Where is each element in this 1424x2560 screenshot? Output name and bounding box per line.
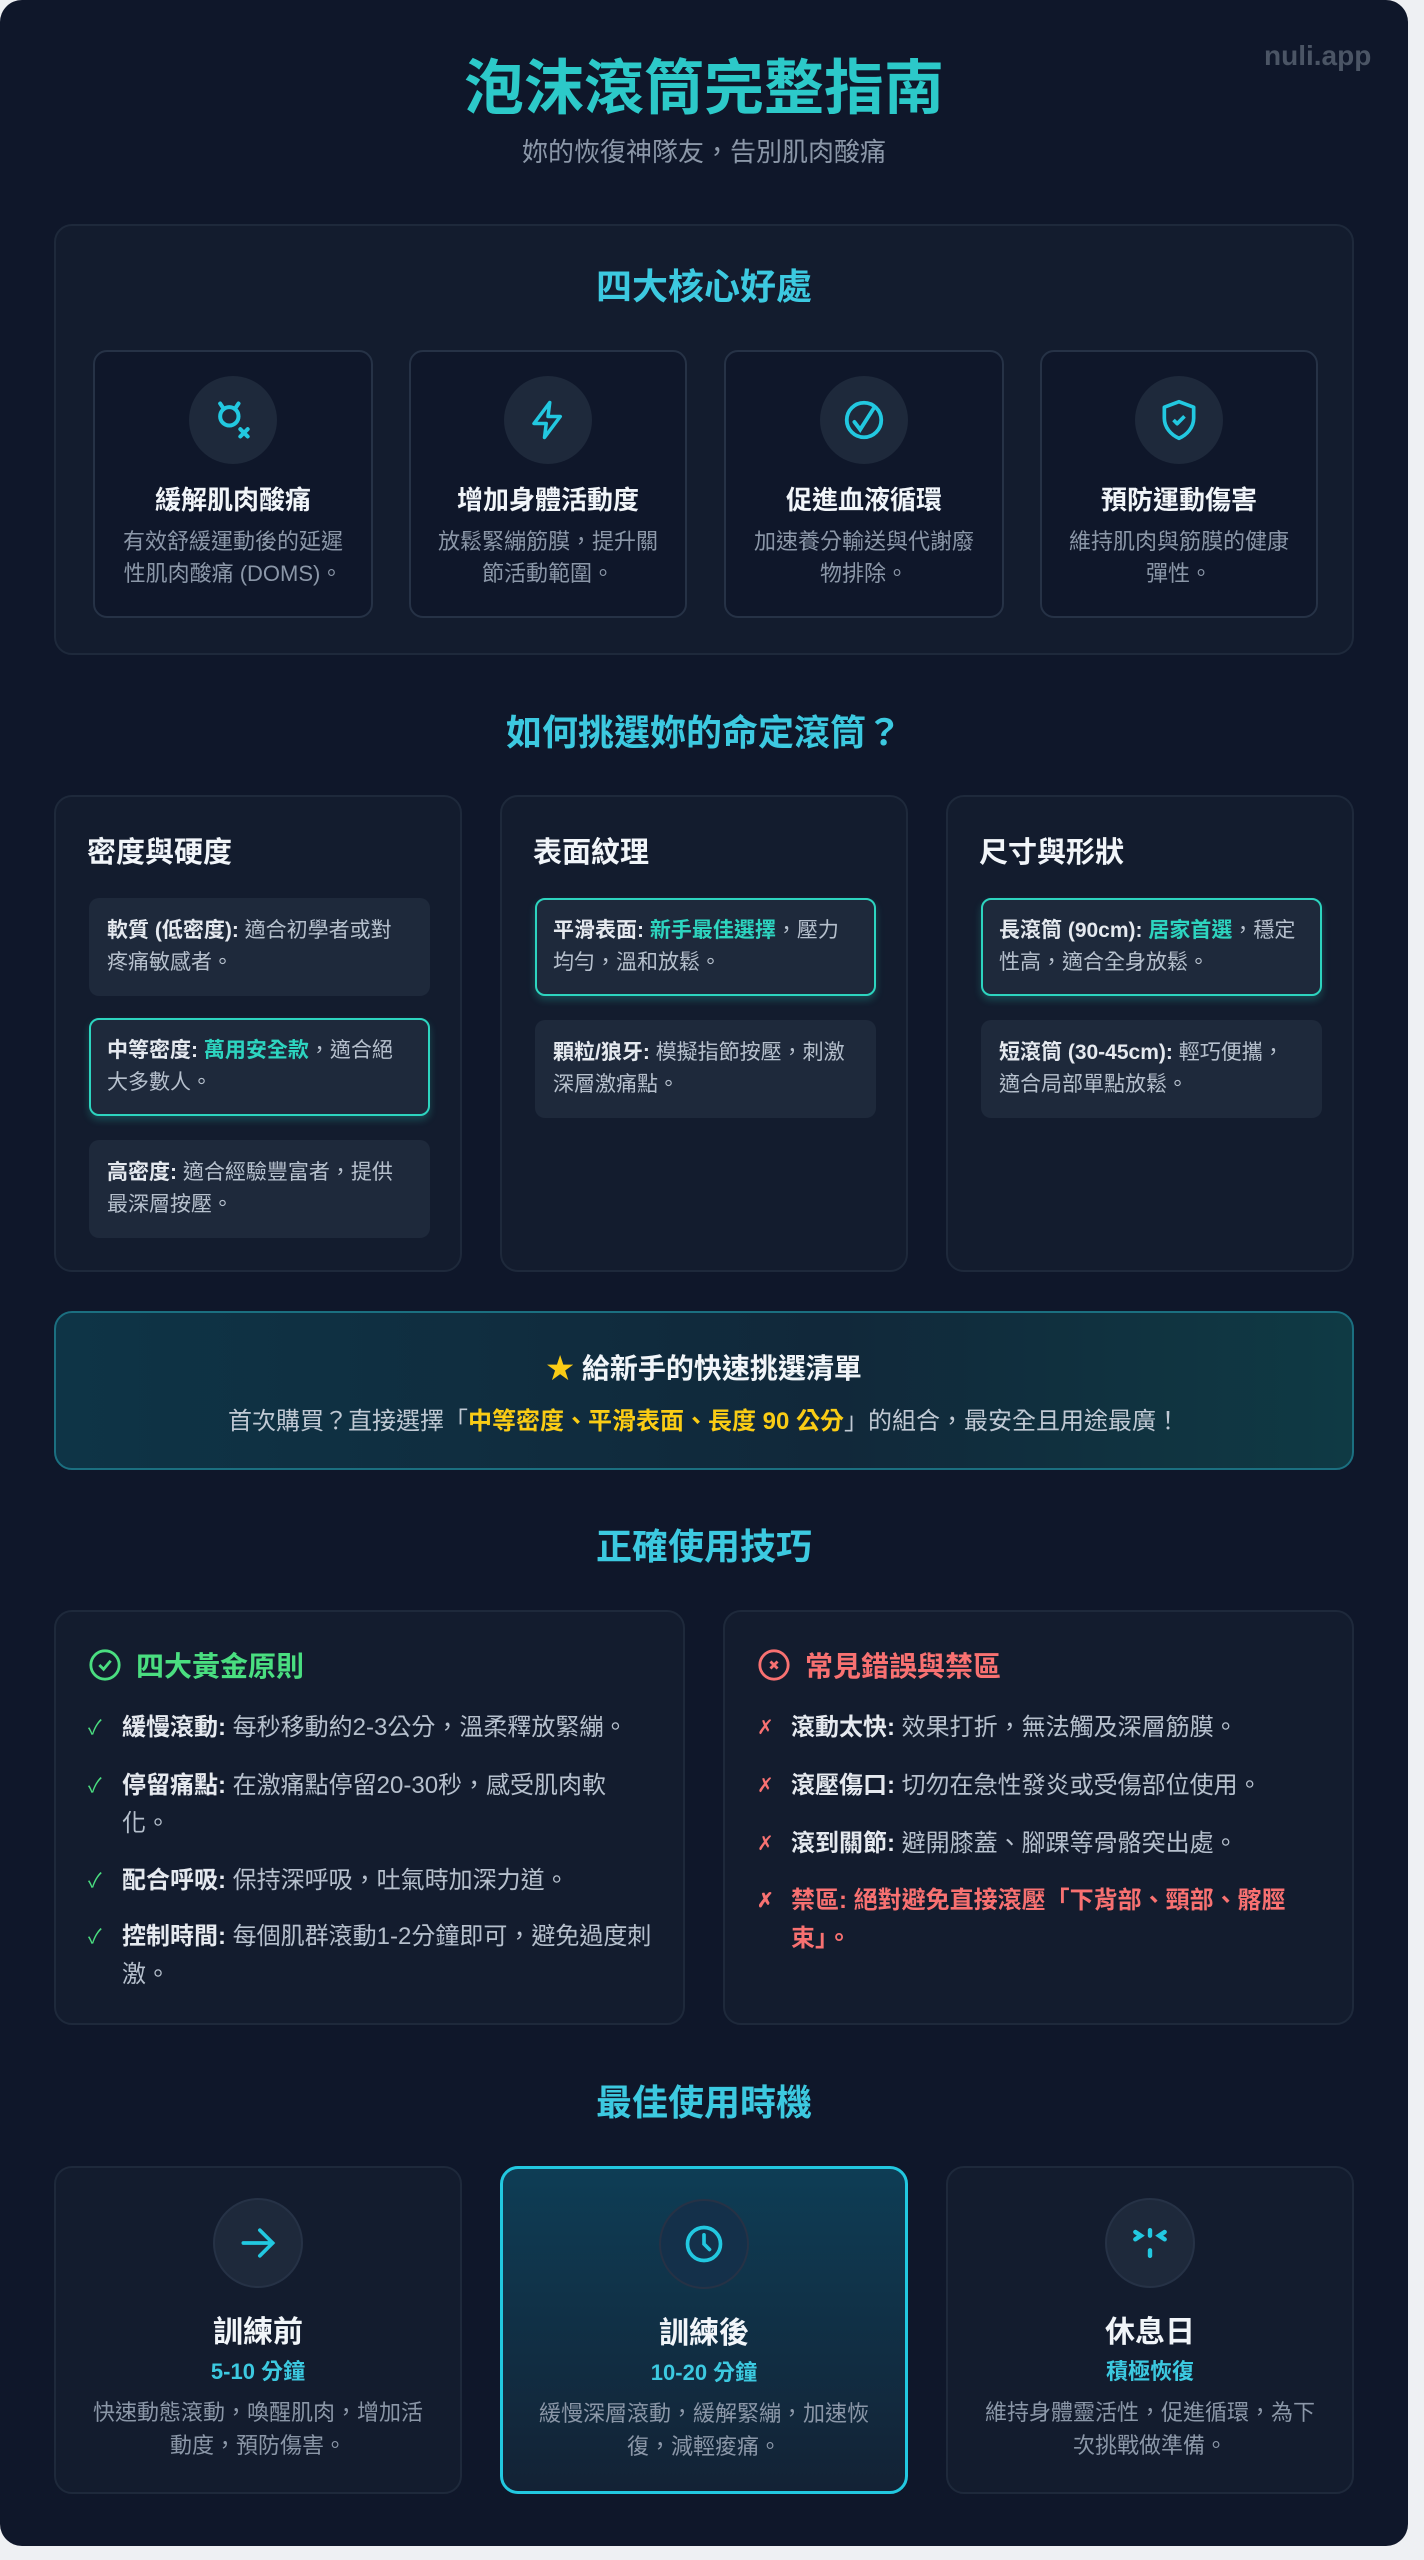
icon: arrow xyxy=(213,2198,303,2288)
heading: golden rules: 四大黃金原則 xyxy=(136,1651,304,1682)
icon: check circle xyxy=(820,376,908,464)
card: before training: 5-10 分鐘 xyxy=(211,2359,305,2384)
card: circulation xyxy=(724,350,1004,618)
item: high xyxy=(89,1140,430,1238)
mistake 3: ✗ xyxy=(757,1833,774,1855)
panel: benefits xyxy=(54,224,1354,655)
item: high: 高密度: 適合經驗豐富者，提供最深層按壓。 xyxy=(107,1161,393,1216)
mistake 4: ✗ xyxy=(757,1890,774,1912)
panel: golden rules xyxy=(54,1610,685,2025)
rule 4: ✓ xyxy=(88,1926,102,1948)
item: short: 短滾筒 (30-45cm): 輕巧便攜，適合局部單點放鬆。 xyxy=(999,1041,1284,1096)
card: before training xyxy=(54,2166,462,2494)
panel: size xyxy=(946,795,1354,1272)
heading: choosing: 如何挑選妳的命定滾筒？ xyxy=(506,712,902,753)
item: long: 長滾筒 (90cm): 居家首選，穩定性高，適合全身放鬆。 xyxy=(999,919,1295,974)
card: mobility xyxy=(409,350,687,618)
column heading: 密度與硬度 xyxy=(87,837,232,869)
rule 2: 停留痛點: 在激痛點停留20-30秒，感受肌肉軟化。 xyxy=(122,1772,606,1837)
card: before training: 訓練前 xyxy=(213,2316,303,2349)
icon: bolt xyxy=(504,376,592,464)
icon: clock xyxy=(659,2199,749,2289)
card: circulation: 加速養分輸送與代謝廢物排除。 xyxy=(754,529,974,586)
card: rest day: 維持身體靈活性，促進循環，為下次挑戰做準備。 xyxy=(985,2400,1315,2458)
card: after training (highlight) xyxy=(500,2166,908,2494)
card: circulation: 促進血液循環 xyxy=(786,485,942,515)
item: soft xyxy=(89,898,430,996)
card: before training: 快速動態滾動，喚醒肌肉，增加活動度，預防傷害。 xyxy=(93,2400,423,2458)
title: 泡沫滾筒完整指南 xyxy=(464,55,944,122)
item: grid: 顆粒/狼牙: 模擬指節按壓，刺激深層激痛點。 xyxy=(553,1041,845,1096)
heading: techniques: 正確使用技巧 xyxy=(596,1526,812,1567)
card: rest day xyxy=(946,2166,1354,2494)
panel: density xyxy=(54,795,462,1272)
column heading: 表面紋理 xyxy=(533,837,649,869)
card: prevent injury: 維持肌肉與筋膜的健康彈性。 xyxy=(1069,529,1289,586)
callout text: 首次購買？直接選擇「中等密度、平滑表面、長度 90 公分」的組合，最安全且用途最廣！ xyxy=(228,1408,1180,1435)
rule 1: 緩慢滾動: 每秒移動約2-3公分，溫柔釋放緊繃。 xyxy=(122,1714,627,1741)
card: after training (highlight): 緩慢深層滾動，緩解緊繃，加速恢復，減輕痠痛。 xyxy=(539,2401,869,2459)
heading: mistakes: 常見錯誤與禁區 xyxy=(805,1651,1001,1682)
card: relieve soreness xyxy=(93,350,373,618)
rule 4: 控制時間: 每個肌群滾動1-2分鐘即可，避免過度刺激。 xyxy=(122,1923,651,1988)
card: relieve soreness: 緩解肌肉酸痛 xyxy=(155,485,311,515)
panel: mistakes xyxy=(723,1610,1354,2025)
brand label: nuli.app xyxy=(1264,40,1371,71)
mistake 4: 禁區: 絕對避免直接滾壓「下背部、頸部、髂脛束」。 xyxy=(791,1887,1286,1952)
rule 3: 配合呼吸: 保持深呼吸，吐氣時加深力道。 xyxy=(122,1867,569,1894)
item: smooth xyxy=(535,898,876,996)
icon: gender-like xyxy=(189,376,277,464)
card: after training (highlight): 訓練後 xyxy=(659,2317,749,2350)
rule 1: ✓ xyxy=(88,1717,102,1739)
icon: activity xyxy=(1105,2198,1195,2288)
card: prevent injury xyxy=(1040,350,1318,618)
column heading: 尺寸與形狀 xyxy=(979,837,1124,869)
callout title: ★ 給新手的快速挑選清單 xyxy=(546,1353,862,1384)
mistake 3: 滾到關節: 避開膝蓋、腳踝等骨骼突出處。 xyxy=(791,1830,1238,1857)
callout: quick pick xyxy=(54,1311,1354,1470)
panel: surface xyxy=(500,795,908,1272)
card: rest day: 積極恢復 xyxy=(1106,2359,1194,2384)
rule 2: ✓ xyxy=(88,1775,102,1797)
item: grid xyxy=(535,1020,876,1118)
item: long xyxy=(981,898,1322,996)
heading: benefits: 四大核心好處 xyxy=(596,266,812,307)
item: short xyxy=(981,1020,1322,1118)
card: rest day: 休息日 xyxy=(1105,2316,1195,2349)
card: mobility: 增加身體活動度 xyxy=(457,485,639,515)
mistake 1: ✗ xyxy=(757,1717,774,1739)
card: after training (highlight): 10-20 分鐘 xyxy=(651,2360,757,2385)
mistake 2: 滾壓傷口: 切勿在急性發炎或受傷部位使用。 xyxy=(791,1772,1262,1799)
mistake 1: 滾動太快: 效果打折，無法觸及深層筋膜。 xyxy=(791,1714,1238,1741)
item: smooth: 平滑表面: 新手最佳選擇，壓力均勻，溫和放鬆。 xyxy=(553,919,839,974)
item: medium xyxy=(89,1018,430,1116)
icon: shield xyxy=(1135,376,1223,464)
heading: timing: 最佳使用時機 xyxy=(596,2082,812,2123)
item: medium: 中等密度: 萬用安全款，適合絕大多數人。 xyxy=(107,1039,393,1094)
mistake 2: ✗ xyxy=(757,1775,774,1797)
subtitle: 妳的恢復神隊友，告別肌肉酸痛 xyxy=(522,137,886,167)
card: relieve soreness: 有效舒緩運動後的延遲性肌肉酸痛 (DOMS)。 xyxy=(123,529,343,586)
item: soft: 軟質 (低密度): 適合初學者或對疼痛敏感者。 xyxy=(107,919,392,974)
card: prevent injury: 預防運動傷害 xyxy=(1101,485,1257,515)
card: mobility: 放鬆緊繃筋膜，提升關節活動範圍。 xyxy=(438,529,658,586)
rule 3: ✓ xyxy=(88,1870,102,1892)
